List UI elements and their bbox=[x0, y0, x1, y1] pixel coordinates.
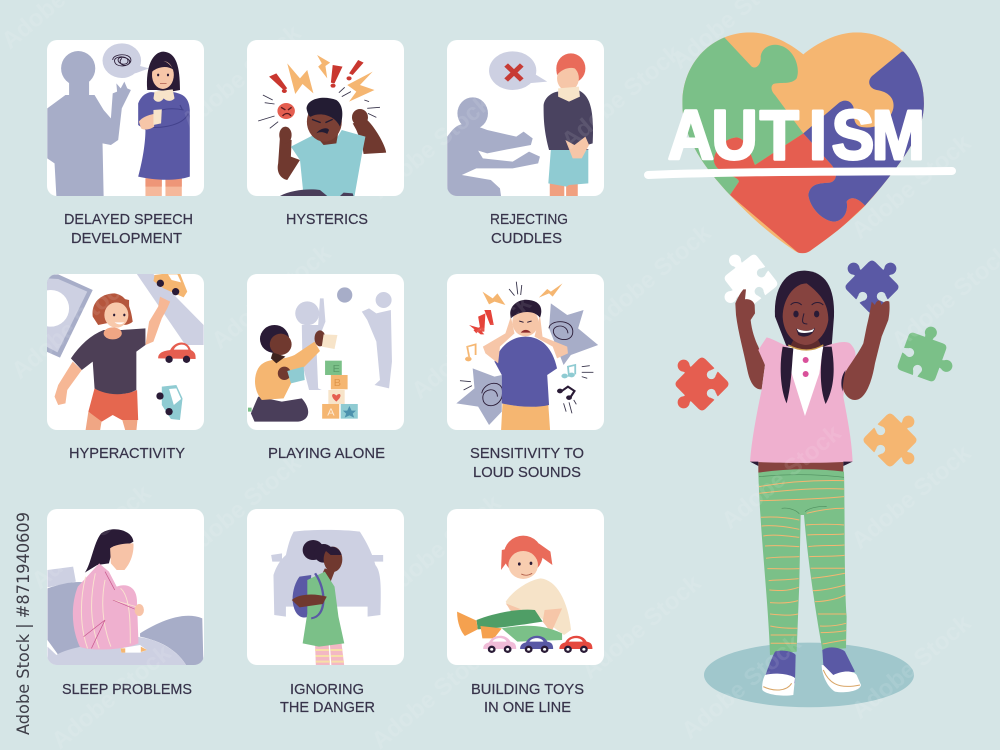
waist seam bbox=[759, 475, 844, 514]
label: BUILDING TOYS bbox=[471, 682, 584, 698]
watermark: Adobe Stock bbox=[587, 219, 717, 335]
watermark: Adobe Stock bbox=[847, 129, 977, 245]
panel: building toys in one line bbox=[447, 509, 604, 716]
card background bbox=[47, 274, 204, 430]
right shoe bbox=[822, 647, 855, 677]
card background bbox=[47, 509, 204, 665]
toy car: purple bbox=[520, 636, 553, 653]
illustration: running girl with toy cars bbox=[33, 273, 204, 431]
watermark: Adobe Stock bbox=[177, 19, 307, 135]
label: DEVELOPMENT bbox=[71, 231, 182, 247]
card background bbox=[447, 40, 604, 196]
card background bbox=[47, 40, 204, 196]
panel: rejecting cuddles bbox=[447, 40, 604, 247]
puzzle piece: green bbox=[896, 320, 963, 387]
label: HYSTERICS bbox=[286, 212, 368, 228]
label: DELAYED SPEECH bbox=[64, 212, 193, 228]
panel: hyperactivity bbox=[47, 274, 204, 458]
card background bbox=[447, 509, 604, 665]
label bbox=[64, 212, 193, 247]
illustration: child with letter blocks and shadow children: A bbox=[327, 408, 335, 419]
label: HYPERACTIVITY bbox=[69, 446, 185, 462]
puzzle piece: purple bbox=[835, 242, 909, 315]
watermark: Adobe Stock bbox=[377, 489, 507, 605]
label bbox=[280, 682, 375, 716]
watermark: Adobe Stock bbox=[177, 449, 307, 565]
watermark: Adobe Stock bbox=[577, 569, 707, 685]
girl standing with puzzle pieces bbox=[704, 271, 914, 707]
watermark: Adobe Stock bbox=[7, 269, 137, 385]
left shoe bbox=[765, 651, 796, 683]
label: SENSITIVITY TO bbox=[470, 446, 584, 462]
label bbox=[471, 682, 584, 716]
title underline bbox=[648, 171, 952, 175]
watermark: Adobe Stock bbox=[407, 289, 537, 405]
watermark: Adobe Stock bbox=[367, 89, 497, 205]
watermark: Adobe Stock bbox=[847, 439, 977, 555]
label: REJECTING bbox=[490, 212, 568, 228]
buttons bbox=[803, 357, 809, 377]
shirt bbox=[750, 337, 856, 463]
watermark: Adobe Stock bbox=[27, 479, 157, 595]
label: CUDDLES bbox=[491, 231, 562, 247]
label: SLEEP PROBLEMS bbox=[62, 682, 192, 698]
panel: sensitivity to loud sounds bbox=[447, 274, 604, 481]
braids bbox=[781, 347, 834, 404]
label: LOUD SOUNDS bbox=[473, 465, 581, 481]
illustration: shadow adult reaching to boy bbox=[447, 51, 593, 197]
card background bbox=[447, 274, 604, 430]
left arm bbox=[735, 289, 765, 389]
neck bbox=[790, 340, 822, 350]
illustration: shadow adult and girl with speech bubble bbox=[47, 43, 190, 197]
stock id vertical text: Adobe Stock | #871940609 bbox=[14, 512, 34, 735]
card background bbox=[247, 509, 404, 665]
puzzle piece: red bbox=[657, 347, 730, 421]
puzzle piece: orange bbox=[862, 403, 935, 477]
toy car: pink bbox=[483, 636, 516, 653]
watermark: Adobe Stock bbox=[557, 39, 687, 155]
toy car: red bbox=[559, 636, 592, 653]
illustration: girl in pajamas sitting on bed bbox=[47, 529, 203, 666]
midriff bbox=[758, 460, 843, 473]
label: IN ONE LINE bbox=[484, 700, 571, 716]
face bbox=[783, 283, 828, 345]
legging stripes bbox=[759, 481, 846, 644]
title: AUTISM bbox=[668, 96, 925, 175]
illustration: man covering ears with noise bursts bbox=[456, 282, 598, 431]
label bbox=[470, 446, 584, 481]
panel: delayed speech development bbox=[47, 40, 204, 247]
ground shadow bbox=[704, 643, 914, 707]
illustration: child with letter blocks and shadow children: B bbox=[334, 378, 341, 389]
shirt front bbox=[788, 347, 823, 416]
illustration: child with letter blocks and shadow children bbox=[248, 287, 392, 422]
label: PLAYING ALONE bbox=[268, 446, 385, 462]
illustration: girl lining up toy cars bbox=[457, 536, 592, 653]
illustration: shouting boy with lightning and exclamation marks bbox=[258, 55, 386, 196]
label bbox=[490, 212, 568, 247]
watermark: Adobe Stock bbox=[677, 629, 807, 745]
back hair bbox=[775, 271, 834, 347]
watermark: Adobe Stock bbox=[847, 609, 977, 725]
watermark: Adobe Stock bbox=[717, 419, 847, 535]
illustration: girl with backpack in front of a car silhouette bbox=[271, 530, 383, 666]
panel: hysterics bbox=[247, 40, 404, 228]
watermark: Adobe Stock bbox=[207, 239, 337, 355]
right arm bbox=[842, 301, 890, 400]
panel: playing alone bbox=[247, 274, 404, 462]
card background bbox=[247, 40, 404, 196]
puzzle piece: white bbox=[706, 243, 779, 316]
card background bbox=[247, 274, 404, 430]
label: THE DANGER bbox=[280, 700, 375, 716]
panel: ignoring the danger bbox=[247, 509, 404, 716]
illustration: child with letter blocks and shadow children: E bbox=[333, 364, 340, 375]
panel: sleep problems bbox=[47, 509, 204, 698]
leggings bbox=[758, 469, 847, 655]
label: IGNORING bbox=[290, 682, 364, 698]
puzzle heart bbox=[682, 32, 924, 254]
